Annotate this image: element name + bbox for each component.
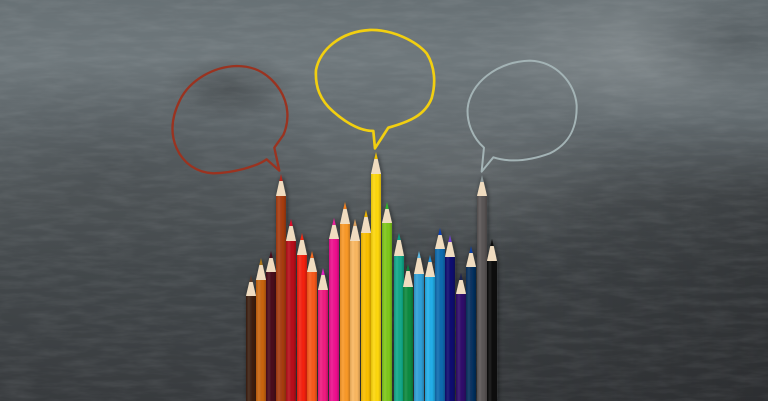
pencil: red-brown, under the red bubble [276,174,286,401]
pencil: purple [456,273,466,401]
pencil: maroon [266,251,276,401]
pencil: lime green [382,202,392,401]
pencil: red [297,233,307,401]
pencil: pink [318,268,328,401]
pencil: dark green [403,264,413,401]
pencil: crimson [286,219,296,401]
pencil: light blue [414,251,424,401]
speech bubble: red [173,66,287,173]
pencil: blue [435,228,445,401]
pencil: ochre orange [256,258,266,401]
pencil: teal [394,233,404,401]
pencil: orange [340,202,350,401]
pencil: sky blue [425,255,435,401]
speech bubble: grey [468,61,577,172]
pencil: grey, under the grey bubble [477,175,487,401]
pencil: golden yellow [361,210,371,401]
pencil: light orange [350,219,360,401]
pencil: black [487,239,497,401]
pencil: navy [466,246,476,401]
pencil: dark brown [246,275,256,401]
pencil: magenta [329,218,339,401]
pencil: orange-red [307,251,317,401]
pencil: yellow, under the yellow bubble [371,152,381,401]
pencil: indigo [445,235,455,401]
speech bubble: yellow [316,30,434,148]
pencils: row of 24 coloured pencils [246,152,497,401]
